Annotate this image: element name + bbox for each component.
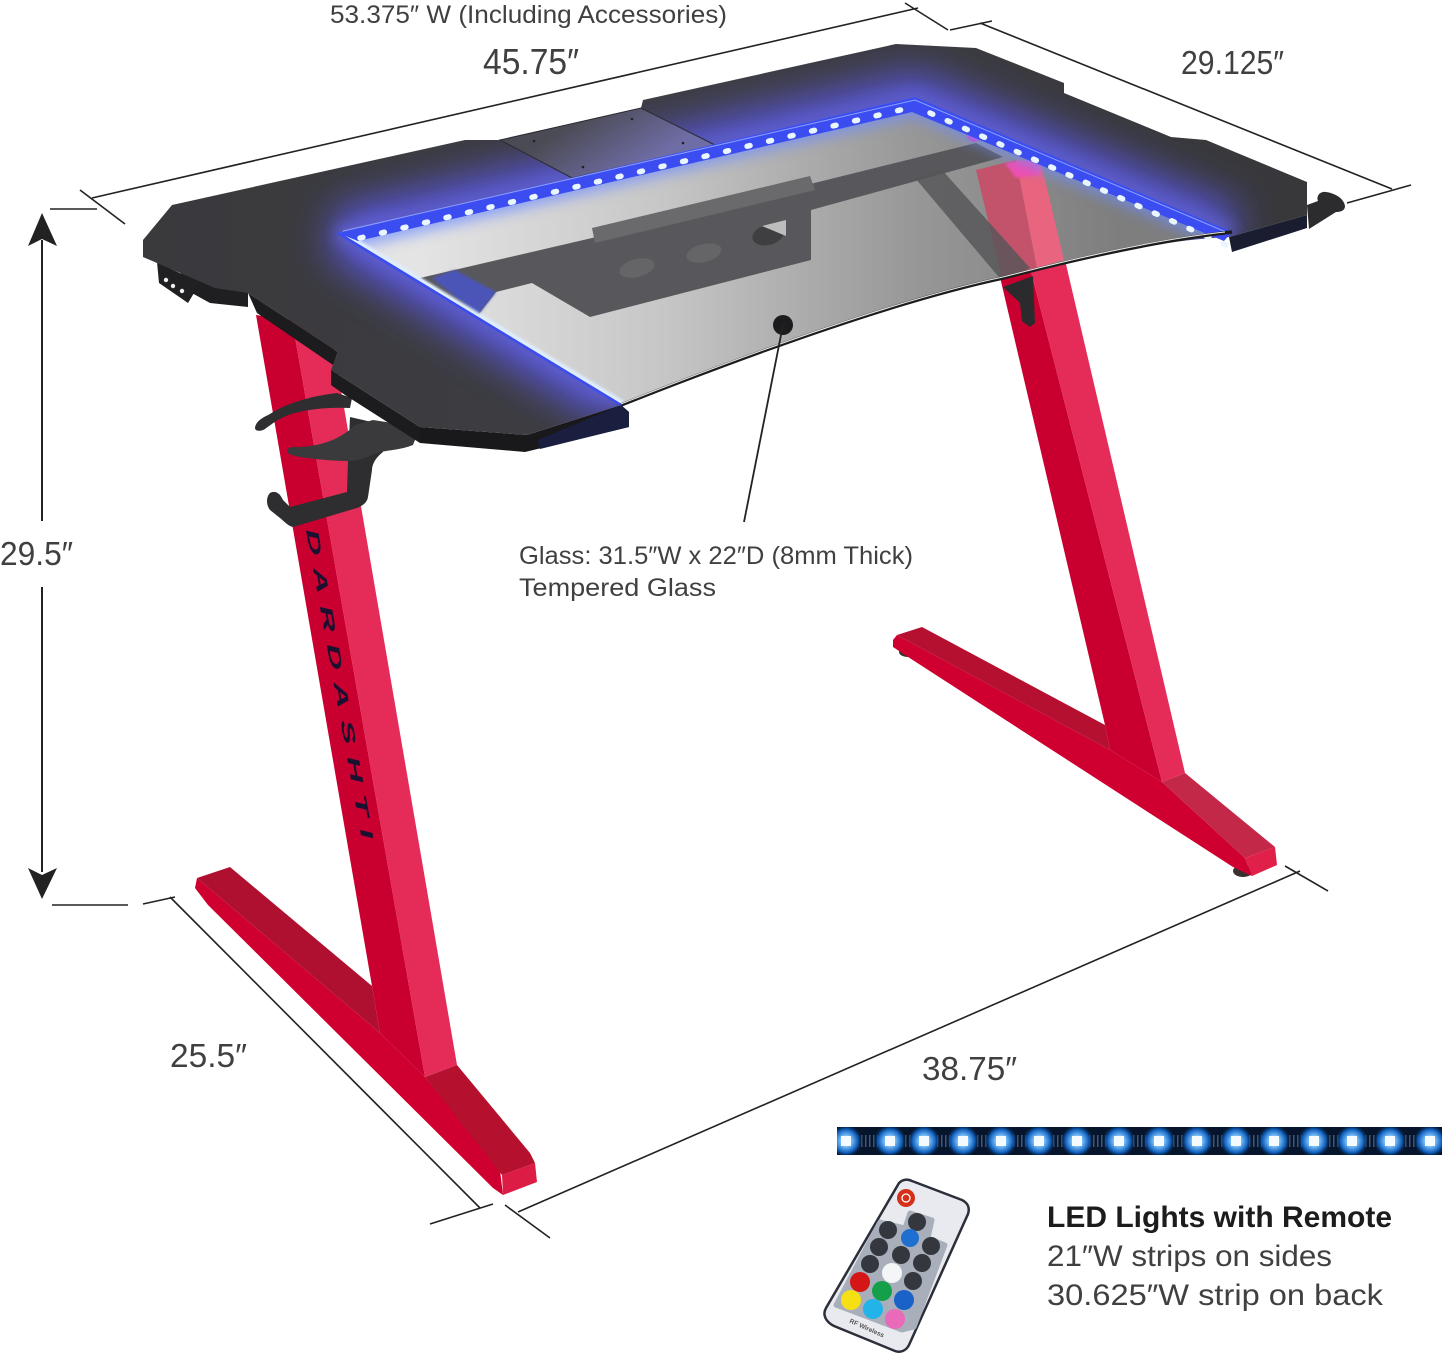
headphone hook xyxy=(267,417,385,527)
right hanger xyxy=(1307,192,1345,229)
leg seen through glass xyxy=(966,134,1064,282)
power button xyxy=(897,1189,915,1207)
headphone and cup hangers xyxy=(255,393,420,527)
label: desktop width: 45.75″ xyxy=(483,41,579,82)
label: overall width: 53.375″ W (Including Accessories) xyxy=(330,1,727,29)
label: glass specification: Tempered Glass xyxy=(519,574,716,602)
icon: RF remote control xyxy=(824,1180,969,1352)
dimension line: desktop depth xyxy=(950,21,1411,203)
blue glow on desktop xyxy=(338,97,1232,405)
label: foot depth: 25.5″ xyxy=(170,1037,247,1074)
LED lights description: 30.625″W strip on back xyxy=(1047,1279,1384,1312)
brand lettering on leg: DARDASHTI xyxy=(302,527,376,842)
lower hanger arm xyxy=(287,420,420,461)
tempered glass panel xyxy=(338,97,1232,405)
dimension line: desktop width xyxy=(80,3,948,224)
LED lights description xyxy=(1047,1201,1392,1312)
label: glass specification xyxy=(519,542,913,602)
callout pointer: glass xyxy=(744,315,793,522)
right foot xyxy=(893,627,1277,877)
right leg xyxy=(893,260,1277,877)
upper hanger arm xyxy=(255,393,352,431)
desk underside and edges xyxy=(180,215,1307,452)
dimension arrow: height xyxy=(28,209,175,905)
LED dots: side strip xyxy=(930,113,1226,245)
label: leg span: 38.75″ xyxy=(922,1050,1017,1087)
remote button panel xyxy=(836,1213,945,1330)
RF Wireless label: RF Wireless xyxy=(848,1318,885,1340)
glass front edge xyxy=(621,232,1232,405)
dimension line: foot depth xyxy=(170,897,493,1224)
monitor mount plate xyxy=(500,108,715,178)
cross brace seen through glass xyxy=(915,170,1030,282)
LED dots: back strip xyxy=(360,107,913,238)
left leg xyxy=(195,315,537,1195)
left column xyxy=(256,315,457,1077)
colour buttons xyxy=(841,1263,914,1329)
LED lights description: LED Lights with Remote xyxy=(1047,1201,1392,1234)
function buttons xyxy=(861,1213,940,1290)
label: height: 29.5″ xyxy=(0,535,73,572)
dimension line: leg span xyxy=(505,866,1328,1238)
label: glass specification: Glass: 31.5″W x 22″D (8mm Thick) xyxy=(519,542,913,570)
desktop surface xyxy=(143,44,1307,435)
LED light spill xyxy=(345,106,1228,240)
LED strip photo xyxy=(837,1127,1442,1155)
remote body xyxy=(824,1180,969,1352)
label: desktop depth: 29.125″ xyxy=(1181,44,1284,81)
left foot xyxy=(195,867,537,1195)
right column xyxy=(996,260,1185,782)
LED strip channel xyxy=(338,97,1232,405)
LED lights description: 21″W strips on sides xyxy=(1047,1240,1332,1273)
frame seen through glass xyxy=(420,143,1003,317)
right bracket xyxy=(1003,276,1035,327)
usb ports xyxy=(157,262,200,303)
